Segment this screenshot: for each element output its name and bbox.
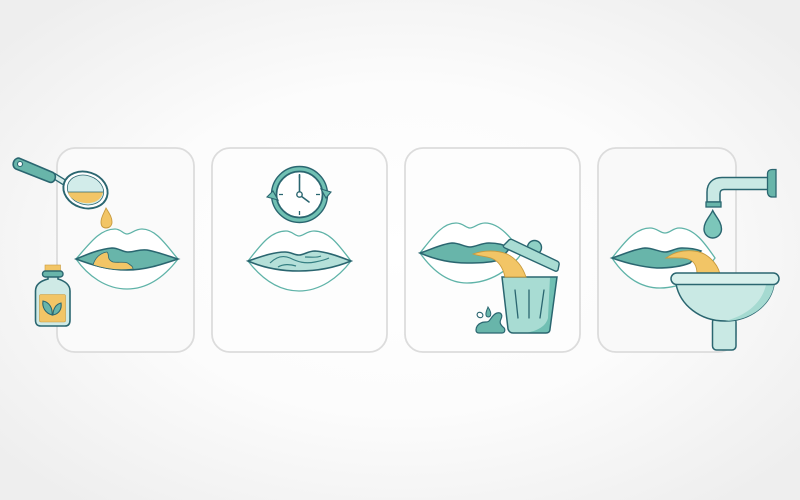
- panel: step 2 swish over time: [212, 148, 387, 352]
- icon: lips with swishing liquid: [248, 231, 351, 291]
- icon: oil stream into sink: [666, 251, 720, 274]
- icon: faucet: [706, 170, 776, 207]
- icon: water drop: [704, 210, 722, 238]
- icon: oil drop: [101, 208, 112, 228]
- panel frame 3: [405, 148, 580, 352]
- icon: oil stream into bin: [473, 251, 526, 277]
- icon: clock with cycle arrows: [267, 166, 331, 222]
- icon: trash bin: [502, 277, 557, 333]
- panel frame 2: [212, 148, 387, 352]
- icon: spoon with oil: [13, 158, 112, 214]
- icon: lips with oil: [76, 229, 178, 289]
- panel frame 4: [598, 148, 736, 352]
- icon: lips spitting: [420, 223, 522, 283]
- icon: splash: [476, 307, 505, 333]
- icon: lips rinsing: [612, 228, 715, 288]
- panel: step 1 apply oil: [13, 148, 194, 352]
- icon: bin lid: [503, 239, 559, 271]
- panel frame 1: [57, 148, 194, 352]
- icon: sink: [671, 273, 779, 350]
- icon: oil bottle: [36, 265, 70, 326]
- panel: step 4 rinse at sink: [598, 148, 779, 352]
- panel: step 3 spit into trash: [405, 148, 580, 352]
